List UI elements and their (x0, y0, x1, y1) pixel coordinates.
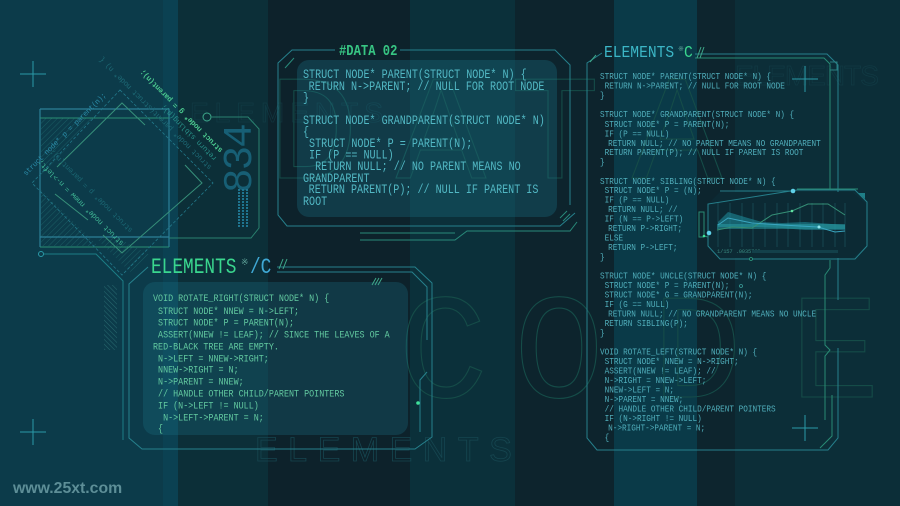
blue square (40, 109, 169, 247)
code text: GRANDPARENT (303, 173, 370, 186)
code text: STRUCT NODE* NNEW = N->RIGHT; (605, 356, 739, 367)
ghost word: DATA: A (396, 54, 486, 224)
code text (303, 69, 545, 209)
icon: crosshair top left (20, 61, 46, 87)
slashes (279, 259, 382, 285)
rotated code: sibling: return sibling(p); (160, 102, 219, 162)
icon: crosshair bottom left (20, 419, 46, 445)
blue series (718, 218, 845, 232)
status dot (416, 401, 420, 405)
rotated code: parent: struct node* g = parent(n); (139, 68, 225, 154)
code text: IF (P == NULL) (605, 195, 669, 206)
grid lines (718, 203, 845, 247)
code text: VOID ROTATE_LEFT(STRUCT NODE* N) { (600, 347, 757, 358)
code text: RETURN N->PARENT; // NULL FOR ROOT NODE (605, 81, 785, 92)
connector: lower left node (38, 252, 123, 440)
heading: ELEMENTS (604, 43, 674, 62)
code text: // HANDLE OTHER CHILD/PARENT POINTERS (158, 388, 345, 400)
code text: { (303, 127, 309, 140)
code text: STRUCT NODE* NNEW = N->LEFT; (158, 305, 299, 317)
code text: ELSE (605, 233, 623, 244)
code text: STRUCT NODE* G = GRANDPARENT(N); (605, 290, 753, 301)
code text (153, 292, 390, 435)
heading: ※ (678, 46, 684, 54)
ghost word: CODE: O (514, 273, 604, 443)
code text: STRUCT NODE* SIBLING(STRUCT NODE* N) { (600, 176, 776, 187)
node dot top (791, 189, 795, 193)
code text: IF (N->RIGHT != NULL) (605, 413, 702, 424)
ghost word: CODE: E (790, 273, 880, 443)
green diamond (55, 103, 202, 253)
code text: N->LEFT = NNEW->RIGHT; (158, 353, 269, 365)
code text: N->RIGHT = NNEW->LEFT; (605, 375, 706, 386)
heading: ※ (241, 258, 249, 268)
code text: ASSERT(NNEW != LEAF); // SINCE THE LEAVES OF A (158, 329, 390, 341)
frame: number tag (169, 113, 264, 238)
code text: STRUCT NODE* GRANDPARENT(STRUCT NODE* N) (303, 115, 545, 128)
code text: STRUCT NODE* P = PARENT(N); (158, 317, 294, 329)
code text: N->PARENT = NNEW; (605, 394, 683, 405)
code text: } (303, 93, 309, 106)
code text: RETURN P->RIGHT; (608, 223, 682, 234)
ghost word: DATA: D (268, 54, 358, 224)
ghost word: CODE: C (398, 273, 488, 443)
chart widget (699, 189, 867, 260)
frame accents (285, 58, 577, 240)
code text: STRUCT NODE* P = PARENT(N); (309, 138, 472, 151)
code text: RETURN NULL; // (608, 204, 677, 215)
green series (717, 204, 845, 230)
heading: ELEMENTS (151, 255, 236, 281)
code text: N->LEFT->PARENT = N; (163, 412, 264, 424)
ghost label: lower elements: ELEMENTS (255, 431, 522, 469)
code text: RETURN NULL; // NO PARENT MEANS NO (315, 161, 521, 174)
code text: N->PARENT = NNEW; (158, 376, 244, 388)
top accent (699, 189, 858, 237)
code text: } (600, 252, 605, 263)
code text: ROOT (303, 196, 327, 209)
ghost word: DATA: T (510, 54, 600, 224)
code text: STRUCT NODE* PARENT(STRUCT NODE* N) { (600, 71, 771, 82)
rotated code: faint inner: struct node* p = parent(n); (49, 148, 135, 234)
node dot left (707, 231, 711, 235)
code text: STRUCT NODE* P = PARENT(N); (605, 119, 729, 130)
chart band (717, 224, 845, 229)
panel: elements c (587, 43, 838, 450)
code text: RETURN P->LEFT; (608, 242, 677, 253)
node dot green (703, 235, 705, 237)
code text: STRUCT NODE* P = PARENT(N); (605, 280, 729, 291)
code text: RETURN N->PARENT; // NULL FOR ROOT NODE (309, 81, 545, 94)
code text: STRUCT NODE* GRANDPARENT(STRUCT NODE* N) { (600, 109, 794, 120)
code text: ASSERT(NNEW != LEAF); // (605, 366, 716, 377)
dashed diamond (32, 90, 213, 275)
code text: NNEW->RIGHT = N; (158, 364, 239, 376)
code text: // HANDLE OTHER CHILD/PARENT POINTERS (605, 404, 776, 415)
code text: IF (P == NULL) (605, 129, 669, 140)
caption bar (752, 250, 838, 253)
panel frame (129, 267, 432, 449)
watermark: www.25xt.com (12, 480, 122, 497)
code text (600, 71, 821, 443)
code text: VOID ROTATE_RIGHT(STRUCT NODE* N) { (153, 292, 329, 304)
code text: RED-BLACK TREE ARE EMPTY. (153, 341, 279, 353)
heading: /C (250, 255, 271, 281)
code text: { (605, 432, 609, 443)
code text: RETURN NULL; // NO GRANDPARENT MEANS NO UNCLE (608, 309, 816, 320)
rotated code: tail: struct node* parent(struct node* n) { (99, 55, 214, 171)
data markers (791, 210, 793, 212)
diagram: rotated code square (22, 55, 225, 275)
panel: data 02 (278, 44, 577, 240)
code text: RETURN PARENT(P); // NULL IF PARENT IS ROOT (605, 147, 803, 158)
panel frame (587, 53, 838, 450)
code text: IF (G == NULL) (605, 299, 669, 310)
axis caption: 1/157 .0035768 (717, 248, 760, 255)
slashes (590, 47, 704, 62)
code text: STRUCT NODE* UNCLE(STRUCT NODE* N) { (600, 271, 766, 282)
green inner frame (695, 58, 832, 448)
code text: } (600, 157, 605, 168)
heading: #DATA 02 (339, 44, 397, 60)
code text: RETURN PARENT(P); // NULL IF PARENT IS (309, 184, 539, 197)
green square (40, 118, 169, 247)
panel frame (278, 50, 575, 226)
panel fill (297, 60, 557, 217)
panel: elements /c (129, 255, 432, 449)
rotated code: bottom left: struct node* nnew = n->left; (37, 158, 126, 247)
number 834: 834 (218, 125, 264, 193)
code text: IF (P == NULL) (309, 150, 394, 163)
code text: NNEW->LEFT = N; (605, 385, 674, 396)
widget frame (708, 190, 867, 259)
code text: RETURN NULL; // NO PARENT MEANS NO GRANDPARENT (608, 138, 821, 149)
heading: C (684, 43, 693, 62)
panel fill (143, 282, 408, 435)
decorative hatched bar (104, 285, 117, 350)
corner bracket (830, 62, 837, 70)
tiny dash columns (239, 189, 247, 228)
code text: STRUCT NODE* P = (N); (605, 185, 702, 196)
ghost label: upper left elements: ELEMENTS (190, 97, 389, 128)
code text: STRUCT NODE* PARENT(STRUCT NODE* N) { (303, 69, 527, 82)
hatched corner fills (41, 118, 150, 272)
code text: } (600, 90, 605, 101)
icon: crosshair top right (792, 66, 818, 92)
rotated code: left edge: struct node* p = parent(n); (22, 92, 108, 178)
ghost word: CODE: D (652, 273, 742, 443)
code text: IF (N == P->LEFT) (605, 214, 683, 225)
ghost label: upper right elements: ELEMENTS (735, 60, 878, 91)
corner marker (858, 193, 865, 199)
bottom tick (750, 258, 752, 260)
code text: N->RIGHT->PARENT = N; (608, 423, 705, 434)
small ring marker (740, 284, 742, 288)
widget backing (708, 192, 866, 258)
code text: IF (N->LEFT != NULL) (158, 400, 259, 412)
code text: } (600, 328, 605, 339)
ghost word: DATA: A (632, 54, 722, 224)
code text: { (158, 423, 163, 435)
code text: RETURN SIBLING(P); (605, 318, 688, 329)
chart area (718, 212, 845, 230)
icon: crosshair bottom right (792, 415, 818, 441)
data marker blue (818, 226, 820, 228)
